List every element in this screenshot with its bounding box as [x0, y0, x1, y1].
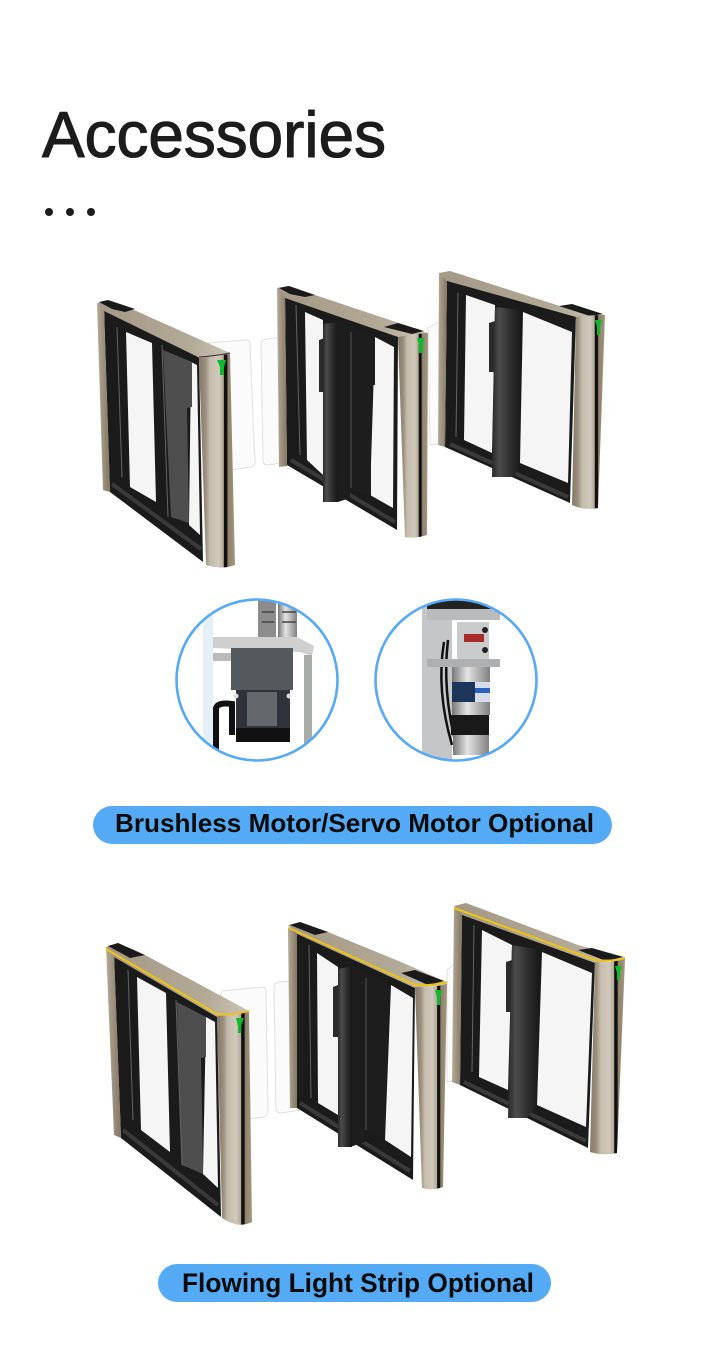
gate middle with strip: [288, 922, 447, 1189]
detail circle: brushless motor: [176, 599, 338, 761]
product: three-gate turnstile lane (light strip version): [106, 903, 625, 1225]
caption pill: motor option: Brushless Motor/Servo Motor Optional: [115, 808, 594, 838]
detail circle: servo motor: [375, 599, 537, 761]
glass wing panels: [204, 958, 505, 1125]
title: Accessories: [42, 98, 386, 171]
ellipsis dots: [45, 208, 95, 216]
gate right: [438, 271, 605, 509]
caption pill: light strip option: Flowing Light Strip Optional: [182, 1268, 534, 1298]
product: three-gate turnstile lane (motor version): [97, 271, 605, 568]
gate left: [97, 300, 235, 568]
gate right with strip: [452, 903, 625, 1154]
glass wing panels: [190, 316, 490, 476]
gate middle: [277, 286, 428, 538]
gate left with strip: [106, 943, 252, 1225]
